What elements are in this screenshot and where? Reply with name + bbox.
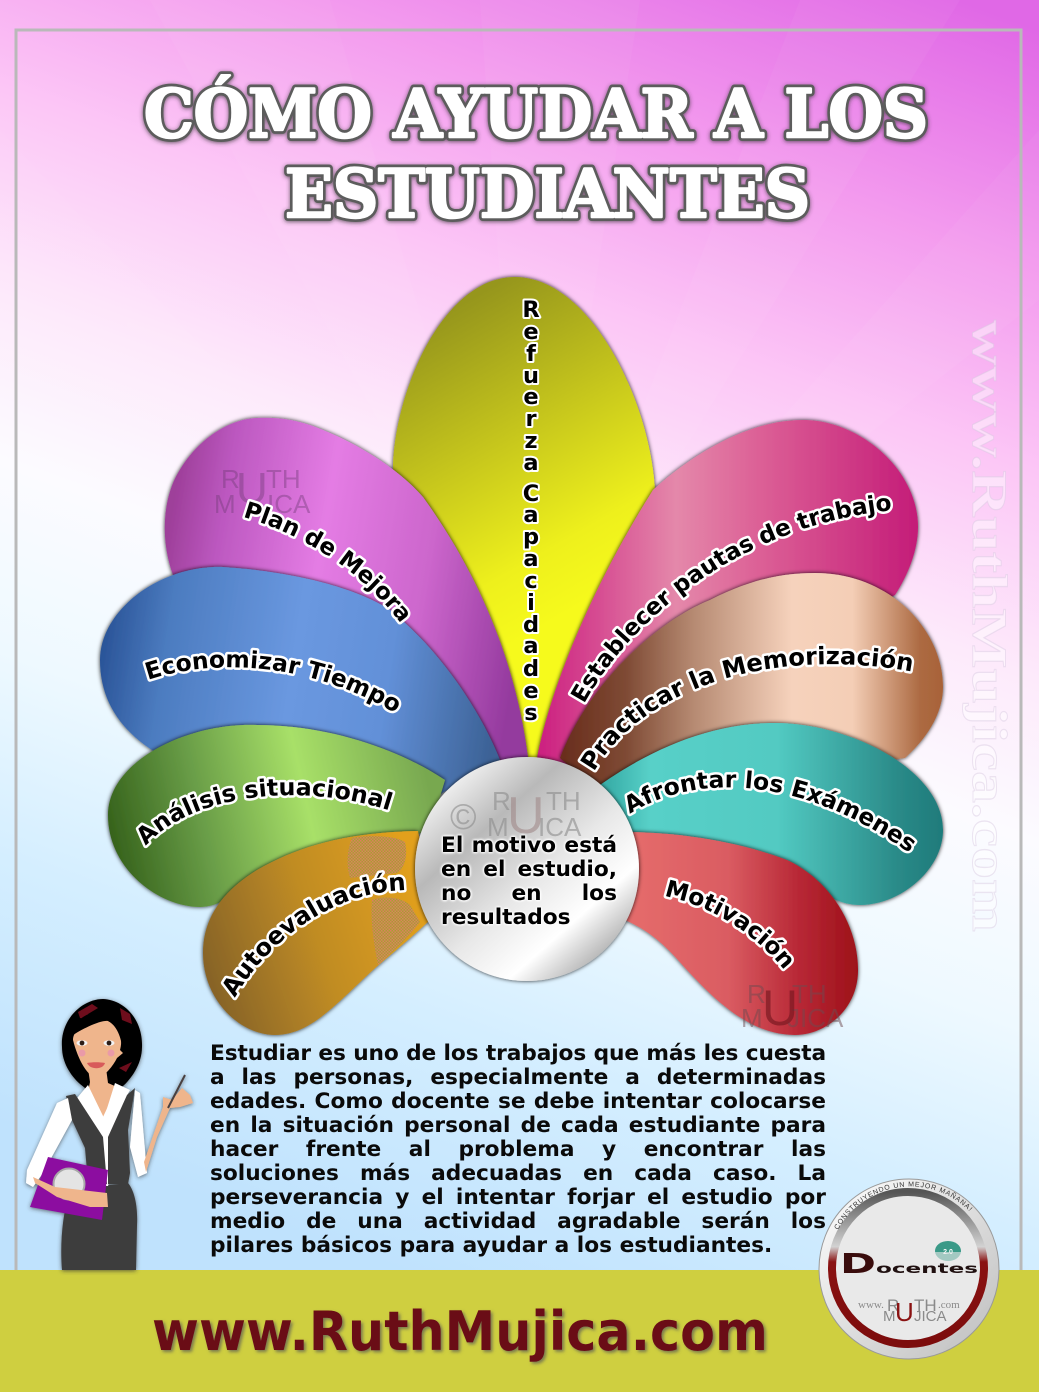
curved tagline: CONSTRUYENDO UN MEJOR MAÑANA! [834, 1182, 972, 1229]
label: economizar tiempo: Economizar Tiempo [142, 648, 402, 714]
forearm holding folder [33, 1177, 108, 1207]
site text: .com [938, 1299, 960, 1311]
site text [858, 1296, 960, 1327]
ring [832, 1192, 984, 1344]
body paragraph: en la situación personal de cada estudiante para [210, 1113, 826, 1138]
watermark: motivacion petal [741, 979, 844, 1036]
watermark: plan de mejora petal: M [214, 489, 236, 519]
sleeves [26, 1098, 72, 1187]
watermark: plan de mejora petal: ICA [267, 489, 311, 519]
face [73, 1018, 123, 1078]
petal: economizar tiempo [100, 567, 500, 800]
center circle motto: resultados [441, 905, 571, 930]
shirt body [85, 1090, 128, 1186]
watermark: motivacion petal: M [741, 1003, 763, 1033]
label: practicar la memorizacion: Practicar la Memorización [578, 643, 914, 772]
center circle motto: El motivo está [441, 833, 617, 858]
vest [66, 1088, 135, 1184]
label: refuerza capacidades: RefuerzaCapacidades [522, 297, 540, 726]
watermark: plan de mejora petal: R [221, 464, 240, 494]
site text: U [895, 1297, 914, 1327]
watermark: center circle: © [450, 796, 477, 837]
site text: www. [858, 1299, 884, 1311]
petal: motivacion [620, 832, 858, 1035]
center circle motto [440, 833, 617, 930]
petal: analisis situacional [108, 725, 445, 907]
dither patches on autoevaluacion [348, 836, 420, 965]
body paragraph: Estudiar es uno de los trabajos que más les cuesta [210, 1041, 826, 1066]
title [144, 75, 928, 233]
outer disc [819, 1179, 999, 1359]
center circle motto: en el estudio, [441, 857, 617, 882]
pencil [168, 1075, 185, 1108]
body paragraph: pilares básicos para ayudar a los estudiantes. [210, 1233, 772, 1258]
eyes, cheeks and mouth [76, 1040, 114, 1068]
body paragraph: medio de una actividad agradable serán los [210, 1209, 826, 1234]
watermark: center circle: U [507, 787, 545, 845]
petal: autoevaluacion [203, 831, 435, 1035]
watermark: center circle: R [492, 786, 511, 816]
title: ESTUDIANTES [285, 155, 810, 233]
center circle motto: no en los [441, 881, 617, 906]
logo badge [818, 1178, 1000, 1360]
petal: establecer pautas [537, 420, 918, 770]
watermark: motivacion petal: U [762, 980, 798, 1036]
raised forearm and hand [144, 1088, 193, 1172]
center circle [415, 757, 639, 981]
hair [62, 999, 142, 1092]
watermark: motivacion petal: R [747, 979, 766, 1009]
watermark: motivacion petal: JICA [787, 1003, 844, 1033]
docentes wordmark: D [840, 1247, 876, 1280]
docentes wordmark [838, 1247, 978, 1280]
label: plan de mejora: Plan de Mejora [242, 498, 410, 624]
body paragraph: a las personas, especialmente a determinadas [210, 1065, 826, 1090]
watermark: center circle: TH [546, 786, 581, 816]
petal: practicar memorizacion [560, 573, 943, 800]
speech bubble [935, 1241, 961, 1261]
collar [73, 1083, 130, 1130]
site text: TH [914, 1296, 937, 1315]
title: ESTUDIANTES [285, 155, 810, 233]
neck and chest [88, 1068, 117, 1117]
label: autoevaluacion: Autoevaluación [220, 870, 407, 1000]
website url: www.RuthMujica.com [152, 1300, 768, 1363]
body paragraph: perseverancia y el intentar forjar el estudio por [210, 1185, 826, 1210]
fringe [72, 1012, 122, 1046]
purple folder [30, 1157, 108, 1220]
hair highlights [78, 1004, 132, 1072]
skirt [61, 1183, 137, 1270]
petal: afrontar examenes [600, 723, 943, 905]
petal: refuerza capacidades [393, 277, 655, 760]
title: CÓMO AYUDAR A LOS [144, 75, 928, 153]
title: CÓMO AYUDAR A LOS [144, 75, 928, 153]
body paragraph: hacer frente al problema y encontrar las [210, 1137, 826, 1162]
label: establecer pautas de trabajo: Establecer pautas de trabajo [568, 492, 893, 705]
label: motivacion: Motivación [664, 877, 794, 972]
petal: plan de mejora [165, 418, 528, 770]
watermark: vertical website: www.RuthMujica.com [962, 320, 1018, 932]
site text: M [883, 1308, 896, 1325]
watermark: plan de mejora petal: U [236, 464, 268, 513]
speech bubble: 2.0 [943, 1249, 953, 1256]
body paragraph: edades. Como docente se debe intentar colocarse [210, 1089, 826, 1114]
flower diagram [62, 274, 946, 1064]
label: analisis situacional: Análisis situacional [136, 776, 396, 848]
watermark: center circle: M [487, 812, 509, 842]
watermark: motivacion petal: TH [792, 979, 827, 1009]
body paragraph: soluciones más adecuadas en cada caso. La [210, 1161, 826, 1186]
body paragraph [210, 1041, 826, 1258]
watermark: plan de mejora petal [214, 464, 311, 519]
docentes wordmark: ocentes [876, 1262, 978, 1277]
site text: JICA [914, 1308, 947, 1325]
watermark: center circle [450, 786, 582, 845]
folder badge [54, 1168, 84, 1200]
bottom band [0, 1270, 1039, 1392]
watermark: plan de mejora petal: TH [266, 464, 301, 494]
site text: R [887, 1296, 899, 1315]
label: afrontar los examenes: Afrontar los Exámenes [624, 768, 918, 854]
watermark: center circle: ICA [538, 812, 582, 842]
illustration: teacher woman [26, 999, 193, 1270]
